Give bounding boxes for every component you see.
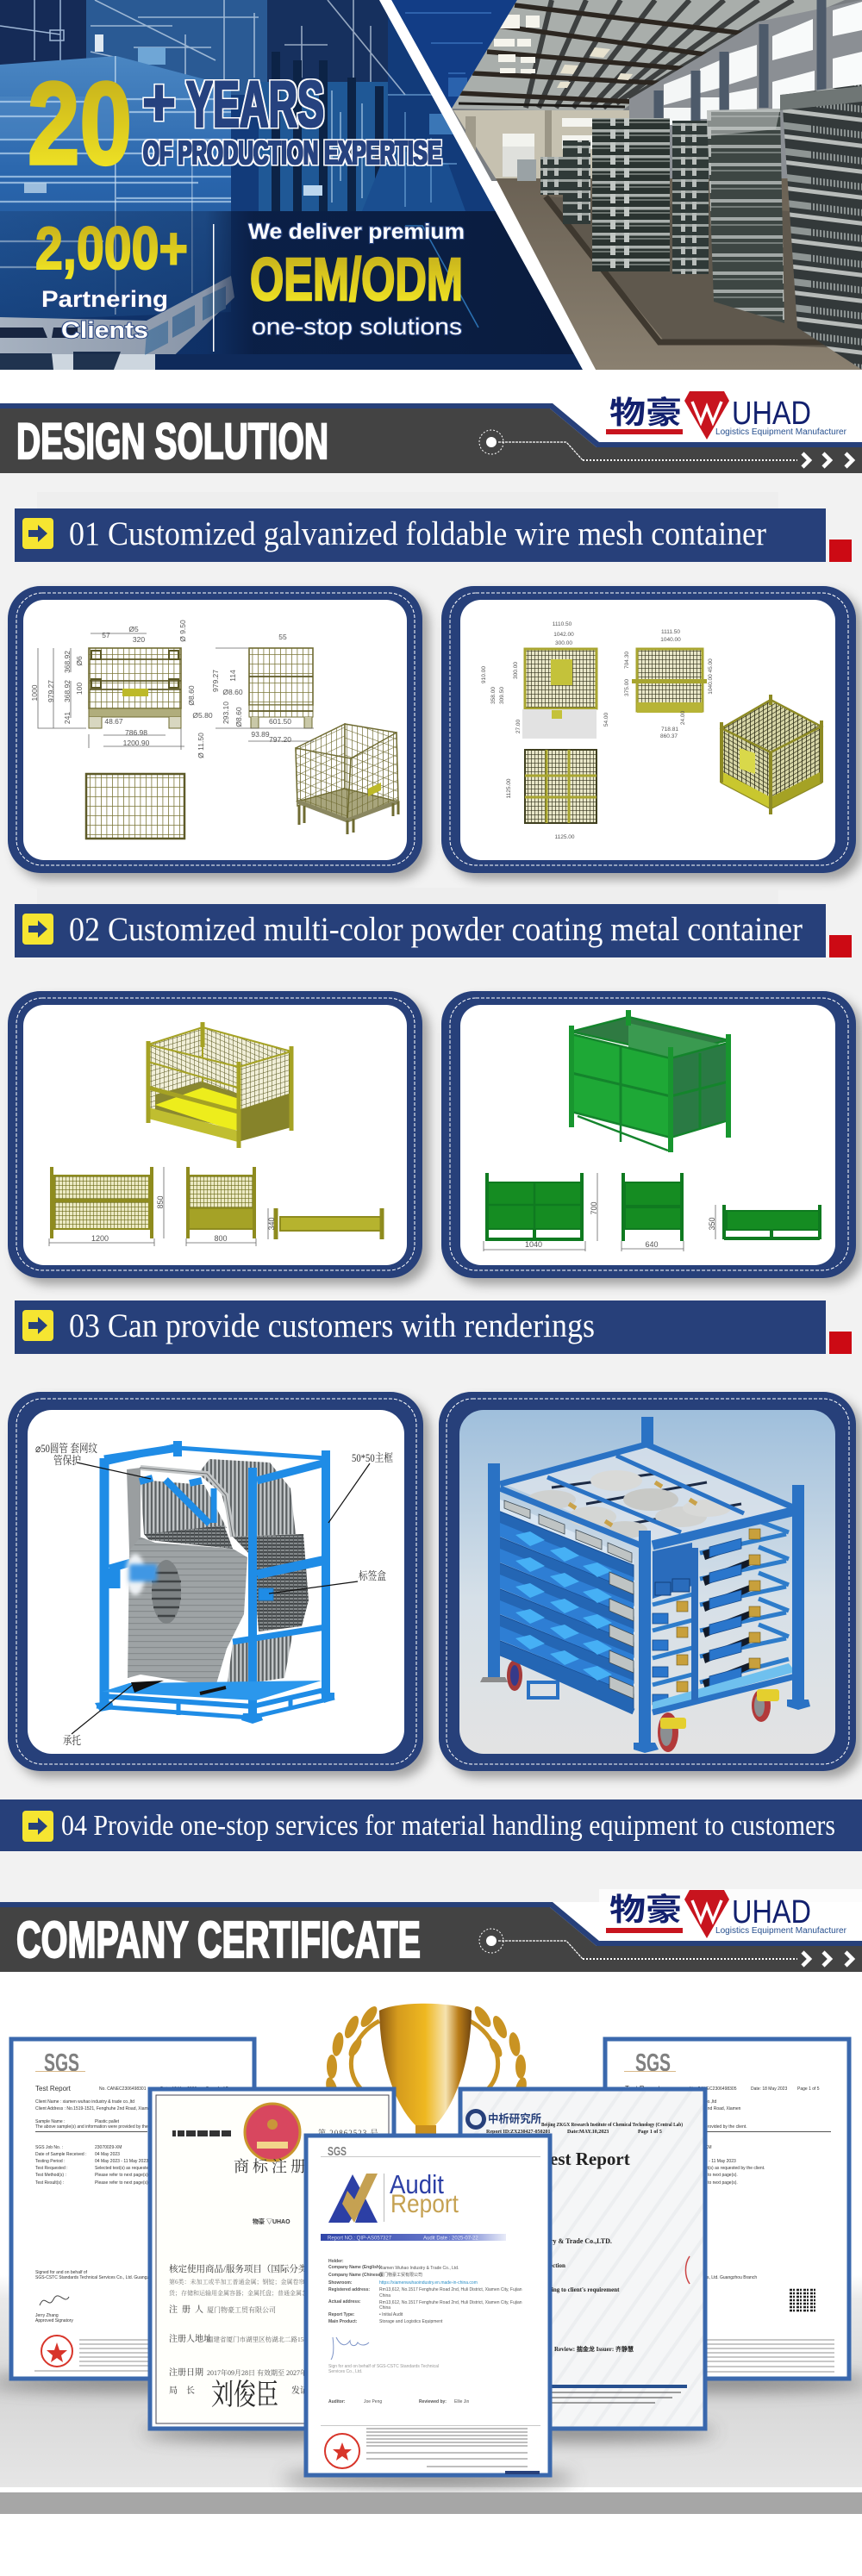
trophy with laurels <box>324 2004 528 2137</box>
certificate: Beijing ZKGX test report <box>460 2089 705 2429</box>
dimension lines <box>38 629 710 833</box>
report number bar: Report NO.: QIP-AS057327 <box>328 2236 392 2241</box>
3D green container <box>572 1010 728 1152</box>
hero headline: 20+ years: YEARS <box>186 68 324 141</box>
side wall with windows <box>629 0 862 181</box>
certificate: audit report: Rm13,612, No.1517 Fenghuhe Road 2nd, Huli District, Xiamen City, Fujian <box>379 2300 522 2305</box>
back post and wheels behind <box>507 1417 779 1722</box>
dimension labels right: 300.00 <box>513 662 519 679</box>
dimensions yellow: 850 <box>156 1195 165 1209</box>
brand logo: UHAD <box>732 1894 811 1930</box>
certificate: SGS right: st(s) as requested by the client. <box>705 2166 765 2171</box>
panel: multi-layer trolley rendering <box>439 1392 862 1778</box>
dimension labels left: Ø8.60 <box>187 685 196 706</box>
certificate: SGS left: Test Result(s) : <box>35 2180 64 2186</box>
dimensions green <box>484 1173 716 1251</box>
back wall <box>453 110 629 178</box>
hero headline: 20+ years <box>28 58 441 189</box>
stat: 2,000+ partnering clients <box>35 215 188 343</box>
certificate: SGS left: 23070029-XM <box>95 2145 122 2150</box>
certificate: trademark registration: 注册日期 <box>169 2367 203 2378</box>
circuit line and chevrons <box>479 1929 853 1966</box>
brand logo: 物豪 <box>609 395 682 430</box>
hero headline: 20+ years: OF PRODUCTION EXPERTISE <box>143 135 441 172</box>
certificate: trademark registration: 发证 <box>291 2385 309 2396</box>
dimension labels left: Ø8.60 <box>234 707 243 727</box>
dimension labels left: Ø5.80 <box>192 711 213 720</box>
rack front frame and base <box>95 1448 334 1724</box>
audit logo: Audit <box>390 2169 444 2199</box>
dimension labels left: 368.92 <box>63 680 72 702</box>
certificate: audit report: • Initial Audit <box>379 2312 403 2317</box>
leader lines <box>72 1463 370 1734</box>
certificate: SGS left: Test Requested : <box>35 2166 68 2171</box>
certificate: SGS left: Date: 18 May 2023 <box>160 2086 197 2092</box>
dimension labels left <box>30 620 291 758</box>
certificate: audit report: Company Name (Chinese): <box>328 2273 384 2278</box>
door speaker recess <box>152 1560 181 1624</box>
certificate: audit report: https://xiamenwuhaoindustry.en.made-in-china.com <box>379 2280 478 2286</box>
certificate: Beijing ZKGX test report: ection <box>550 2262 565 2269</box>
dimension labels left: 48.67 <box>104 717 123 726</box>
certificate: SGS right <box>605 2039 849 2379</box>
white diagonal divider <box>379 0 596 370</box>
section bar 04 <box>0 1799 862 1851</box>
panel: green metal container <box>441 991 862 1285</box>
certificate: audit report: China <box>379 2305 390 2311</box>
dimension labels left: 93.89 <box>251 730 270 739</box>
certificate: trademark registration: 局长 <box>169 2386 203 2396</box>
certificate: trademark registration <box>150 2089 394 2429</box>
annotations: ⌀50圆管 套网纹 <box>35 1442 97 1455</box>
hero vertical divider <box>213 224 214 352</box>
dimension labels left: 114 <box>228 670 237 682</box>
faint band above section 02 <box>37 888 778 904</box>
hero factory photo <box>431 0 862 370</box>
certificate: SGS right: provided by the client. <box>705 2124 747 2130</box>
trolley left face with shelves <box>498 1499 634 1712</box>
audit logo: Report <box>390 2190 459 2218</box>
faint band above section 01 <box>37 492 778 508</box>
dimension labels right: 300.00 <box>555 640 572 646</box>
dimension labels right: 54.00 <box>603 712 609 727</box>
dimension labels left: 797.20 <box>269 735 291 744</box>
factory roof <box>452 0 845 112</box>
brand logo <box>606 1890 847 1938</box>
dimensions yellow: 340 <box>267 1217 276 1231</box>
red marker <box>829 540 852 562</box>
panel: wire mesh container drawing <box>8 586 710 880</box>
dimensions green: 350 <box>708 1217 716 1231</box>
certificate: SGS right: Page 1 of 5 <box>797 2086 820 2092</box>
certificate: trademark registration: 2017年09月28日 有效期至 2027年09月 <box>207 2368 321 2377</box>
trophy cup <box>379 2004 472 2125</box>
icon: yellow arrow <box>22 518 53 549</box>
stacked door panels <box>126 1459 309 1687</box>
header title: COMPANY CERTIFICATE <box>16 1912 421 1968</box>
dimension labels left: 979.27 <box>47 680 55 702</box>
drawing: base view <box>525 750 597 823</box>
certificate: Beijing ZKGX test report: ry & Trade Co.,LTD. <box>550 2237 612 2245</box>
annotations: 标签盒 <box>359 1569 386 1582</box>
certificate: SGS left: Test Report <box>35 2085 72 2093</box>
certificate: SGS left: Client Name : xiamen wuhao industry & trade co.,ltd <box>35 2099 134 2105</box>
hero banner <box>0 0 862 370</box>
concrete floor <box>496 178 862 370</box>
dimension labels left: 241 <box>63 712 72 724</box>
certificate: trademark registration: 第 20862523 号 <box>318 2128 379 2137</box>
certificate: audit report: Rm13,612, No.1517 Fenghuhe Road 2nd, Huli District, Xiamen City, Fujian <box>379 2287 522 2292</box>
dimension labels left: 1000 <box>30 684 39 701</box>
brand logo: Logistics Equipment Manufacturer <box>715 1926 847 1936</box>
certificate: SGS left: Plastic pallet <box>95 2119 120 2124</box>
dimension labels left: 601.50 <box>269 717 291 726</box>
section bar 01 <box>15 508 852 562</box>
OEM/ODM offer: We deliver premium <box>248 220 465 244</box>
icon: yellow arrow <box>22 1811 53 1842</box>
certificate: audit report: Showroom: <box>328 2280 353 2286</box>
dimension labels left: Ø 9.50 <box>178 620 187 642</box>
certificate: audit report: Actual address: <box>328 2299 361 2305</box>
trolley posts and wheels <box>480 1463 810 1753</box>
section bar 02 <box>15 904 852 957</box>
dimension labels right: 375.00 <box>624 679 630 696</box>
hero headline: 20+ years: 20 <box>28 58 132 189</box>
certificate: SGS left: Please refer to next page(s). <box>95 2173 149 2178</box>
rack back frame <box>104 1441 326 1705</box>
certificate: Beijing ZKGX test report: Date:MAY.10,2023 <box>567 2130 609 2135</box>
bottom grey band <box>0 2492 862 2514</box>
certificate: Beijing ZKGX test report: Review: 揣金龙 Issuer: 齐静慧 <box>554 2345 634 2353</box>
brand logo: UHAD <box>732 396 811 432</box>
dimension labels left: 320 <box>133 635 145 644</box>
stat: 2,000+ partnering clients: Clients <box>61 317 148 343</box>
certificate: trademark registration: 商标注册证 <box>234 2158 328 2175</box>
certificate: Beijing ZKGX test report: ling to client's requirement <box>550 2286 620 2293</box>
dimension labels right: 860.37 <box>660 733 678 739</box>
panel: door stamping rack rendering <box>8 1392 430 1778</box>
trolley right face with shelves <box>653 1511 796 1712</box>
dimensions green: 1040 <box>525 1240 542 1249</box>
stacked wire containers <box>517 84 862 370</box>
certificate: audit report: Holder: <box>328 2259 344 2264</box>
panel: yellow powder coated cage <box>8 991 429 1285</box>
dimension labels left: Ø 11.50 <box>197 733 205 758</box>
certificate: Beijing ZKGX test report: Beijing ZKGX Research Institute of Chemical Technology (Central Lab) <box>541 2122 683 2128</box>
certificate: audit report: Storage and Logistics Equipment <box>379 2319 443 2324</box>
certificate: SGS left: SGS Job No. : <box>35 2145 63 2150</box>
certificate: trademark registration: 厦门物豪工贸有限公司 <box>207 2305 276 2314</box>
certificate: Beijing ZKGX test report: Page 1 of 5 <box>638 2130 662 2135</box>
certificate: SGS left: Sample Name : <box>35 2119 65 2124</box>
certificate: trademark registration: 核定使用商品/服务项目（国际分类：6） <box>169 2263 330 2274</box>
certificate: audit report: China <box>379 2293 390 2298</box>
red marker <box>829 1332 852 1354</box>
dimension labels left: 368.92 <box>63 651 72 673</box>
dimension labels left: 979.27 <box>211 670 220 692</box>
drawing: 3D mesh cage <box>721 695 821 814</box>
certificate: SGS right: co.,ltd <box>705 2099 717 2105</box>
red SGS stamp <box>325 2434 359 2468</box>
section heading 02: 02 Customized multi-color powder coating metal container <box>69 911 803 948</box>
certificate: trademark registration: 注册人地址 <box>169 2333 212 2344</box>
annotations: 50*50主框 <box>352 1451 393 1464</box>
certificate: audit report: Xiamen Wuhao Industry & Trade Co., Ltd. <box>379 2266 459 2271</box>
dimension labels left: Ø5 <box>128 625 139 633</box>
header band: design solution <box>0 391 862 473</box>
section background <box>0 473 862 1902</box>
header title: DESIGN SOLUTION <box>16 414 328 470</box>
certificate: SGS left: Date of Sample Received : <box>35 2152 86 2157</box>
dimension labels right: 1040.00 45.00 <box>708 658 714 695</box>
dimension labels left: 100 <box>75 683 84 695</box>
section heading 03: 03 Can provide customers with renderings <box>69 1307 595 1344</box>
icon: yellow arrow <box>22 1310 53 1341</box>
certificate: Beijing ZKGX test report: 中析研究所 <box>488 2112 541 2125</box>
annotations <box>35 1442 393 1747</box>
brand logo: 物豪 <box>609 1892 682 1927</box>
certificate: SGS left: No. CANEC2306498301 <box>99 2086 147 2092</box>
certificate: SGS right: s, Ltd. Guangzhou Branch <box>707 2275 757 2280</box>
certificate: audit report: Report Type: <box>328 2312 355 2317</box>
certificate: SGS left: Client Address : No.1519-1521, Fenghuhe 2nd Road, Xiamen <box>35 2106 153 2111</box>
certificate: SGS left <box>11 2039 254 2379</box>
annotations: 承托 <box>63 1734 81 1747</box>
green elevation views <box>487 1173 820 1241</box>
audit logo <box>328 2169 459 2223</box>
dimension labels left: 786.98 <box>125 728 147 737</box>
certificate: SGS left: Approved Signatory <box>35 2318 73 2323</box>
certificate: SGS right: No. CANEC2306498305 <box>690 2086 737 2092</box>
dimension labels right: 910.00 <box>481 666 487 683</box>
certificate: SGS left: SGS <box>44 2049 79 2077</box>
certificate: SGS left: Test Method(s) : <box>35 2173 66 2178</box>
drawing: 3D wire cage <box>296 724 398 834</box>
dimension labels right <box>481 621 714 840</box>
dimension labels right: 1042.00 <box>553 632 574 638</box>
certificate: audit report: Registered address: <box>328 2287 370 2292</box>
signature <box>331 2337 369 2360</box>
dimension labels left: Ø8.60 <box>222 688 243 696</box>
certificate: audit report: 厦门物豪工贸有限公司 <box>379 2272 422 2278</box>
certificate: trademark registration: 第6类：未加工或半加工普通金属；钢锭；金属卷帘； <box>169 2278 310 2286</box>
OEM/ODM offer: one-stop solutions <box>252 314 462 340</box>
institute seal <box>465 2109 486 2130</box>
pallet <box>0 276 234 370</box>
dimension labels right: 718.81 <box>661 727 678 733</box>
icon: yellow arrow <box>22 914 53 945</box>
drawing: front view <box>89 648 181 728</box>
dimension labels right: 1110.50 <box>553 621 572 627</box>
section bar 03 <box>15 1300 852 1354</box>
certificate: SGS left: Signed for and on behalf of <box>35 2270 88 2275</box>
top frame rails <box>500 1444 793 1545</box>
certificate: SGS left: Jerry Zhang <box>35 2313 59 2318</box>
certificate: SGS right: 3 - 11 May 2023 <box>705 2159 736 2164</box>
dimensions yellow <box>49 1167 276 1246</box>
certificate: audit report <box>306 2136 550 2475</box>
certificate: SGS right: Date: 18 May 2023 <box>751 2086 787 2092</box>
stat: 2,000+ partnering clients: Partnering <box>41 286 168 312</box>
dimensions green: 640 <box>645 1240 659 1249</box>
brand logo: Logistics Equipment Manufacturer <box>715 427 847 437</box>
brand logo <box>606 391 847 440</box>
certificate: SGS left: 04 May 2023 <box>95 2152 120 2157</box>
3D yellow cage <box>148 1022 291 1148</box>
QR code <box>790 2287 815 2313</box>
certificate: SGS right: Test Report <box>625 2085 661 2093</box>
certificate: SGS left: 04 May 2023 - 11 May 2023 <box>95 2159 148 2164</box>
dimensions yellow: 800 <box>214 1234 228 1243</box>
yellow cage elevation views <box>52 1167 382 1239</box>
certificate: audit report: Sign for and on behalf of SGS-CSTC Standards Technical <box>328 2364 439 2369</box>
report number bar <box>321 2234 506 2241</box>
certificate: SGS right: r to next page(s). <box>705 2180 738 2186</box>
dimension labels right: 1125.00 <box>506 778 512 799</box>
drawing: side view <box>632 649 707 713</box>
section heading 01: 01 Customized galvanized foldable wire mesh container <box>69 515 766 552</box>
warehouse aisle columns <box>259 52 465 211</box>
certificate: audit report: Services Co., Ltd. <box>328 2369 362 2374</box>
certificate: SGS right: XM <box>705 2145 712 2150</box>
certificate: trademark registration: 刘俊臣 <box>211 2379 278 2411</box>
annotations: 管保护 <box>53 1454 81 1467</box>
panel: steel mesh cage drawing <box>441 586 862 880</box>
certificate: SGS right: SGS <box>635 2049 671 2077</box>
dimension labels right: 24.00 <box>680 710 686 725</box>
certificate: audit report: Auditor: <box>328 2399 346 2404</box>
certificate: SGS right: r to next page(s). <box>705 2173 738 2178</box>
national emblem <box>245 2104 300 2161</box>
drawing: side view <box>249 648 313 728</box>
dimension labels left: 55 <box>278 633 287 641</box>
drawing: front view <box>522 649 597 739</box>
certificate: audit report: Reviewed by: <box>419 2399 447 2404</box>
dimensions yellow: 1200 <box>91 1234 109 1243</box>
trolley top with parts <box>498 1443 793 1543</box>
certificate: SGS right: 2nd Road, Xiamen <box>705 2106 741 2111</box>
certificate: audit report: Company Name (English): <box>328 2265 383 2270</box>
dimension labels left: Ø6 <box>75 656 84 666</box>
certificate: SGS left: Please refer to next page(s). <box>95 2180 149 2186</box>
dimension labels right: 358.00 <box>490 687 497 704</box>
certificate: trademark registration: 物豪 ▽UHAO <box>253 2217 290 2225</box>
certificate: audit report: Main Product: <box>328 2319 358 2324</box>
floor gradient <box>0 2275 862 2487</box>
certificate: Beijing ZKGX test report: est Report <box>550 2149 630 2169</box>
OEM/ODM offer <box>248 220 465 340</box>
certificate: SGS left: Page 1 of 7 <box>206 2086 228 2092</box>
dimension labels right: 1125.00 <box>554 834 575 840</box>
dimension labels left: 293.10 <box>222 702 230 724</box>
certificate: audit report: SGS <box>328 2144 347 2159</box>
certificate: SGS left: Selected test(s) as requested by <box>95 2166 157 2171</box>
barcode <box>172 2130 231 2136</box>
certificate: SGS left: The above sample(s) and information were provided by the client. <box>35 2124 160 2130</box>
certificate: SGS left: SGS-CSTC Standards Technical Services Co., Ltd. Guangzhou Branch <box>35 2275 172 2280</box>
hero left: blue warehouse backdrop <box>0 0 603 370</box>
dimension labels left: 1200.90 <box>123 739 150 747</box>
circuit line and chevrons <box>479 430 853 467</box>
drawing: top view <box>86 774 184 839</box>
stat: 2,000+ partnering clients: 2,000+ <box>35 215 188 282</box>
certificate: trademark registration: 注册人 <box>169 2304 208 2315</box>
certificate: audit report: Ellie Jin <box>454 2399 469 2404</box>
dimension labels right: 704.30 <box>624 652 630 669</box>
dimensions green: 700 <box>590 1201 598 1215</box>
certificate: audit report: Joe Peng <box>364 2399 382 2404</box>
hero top blue wedge <box>391 0 517 109</box>
dimension labels right: 309.50 <box>499 687 505 704</box>
red marker <box>829 935 852 957</box>
dimension labels right: 27.00 <box>515 719 522 733</box>
certificate: Beijing ZKGX test report: Report ID:ZX230427-050201 <box>486 2130 550 2135</box>
report number bar: Audit Date : 2025-07-22 <box>423 2236 478 2241</box>
dimension labels right: 1111.50 <box>661 629 680 635</box>
header band: company certificate <box>0 1889 862 1972</box>
certificate: trademark registration: 福建省厦门市湖里区枋湖北二路1517-1521号 <box>207 2335 332 2343</box>
dimension labels right: 1040.00 <box>660 637 681 643</box>
certificate: SGS left: Testing Period : <box>35 2159 65 2164</box>
OEM/ODM offer: OEM/ODM <box>250 246 463 313</box>
certificate: trademark registration: 货；存储和运输用金属容器；金属托盘；普通金属艺术品 <box>169 2289 320 2297</box>
floor shadows <box>0 2374 862 2486</box>
hero headline: 20+ years: + <box>142 64 176 140</box>
dimension labels left: 57 <box>102 631 110 639</box>
